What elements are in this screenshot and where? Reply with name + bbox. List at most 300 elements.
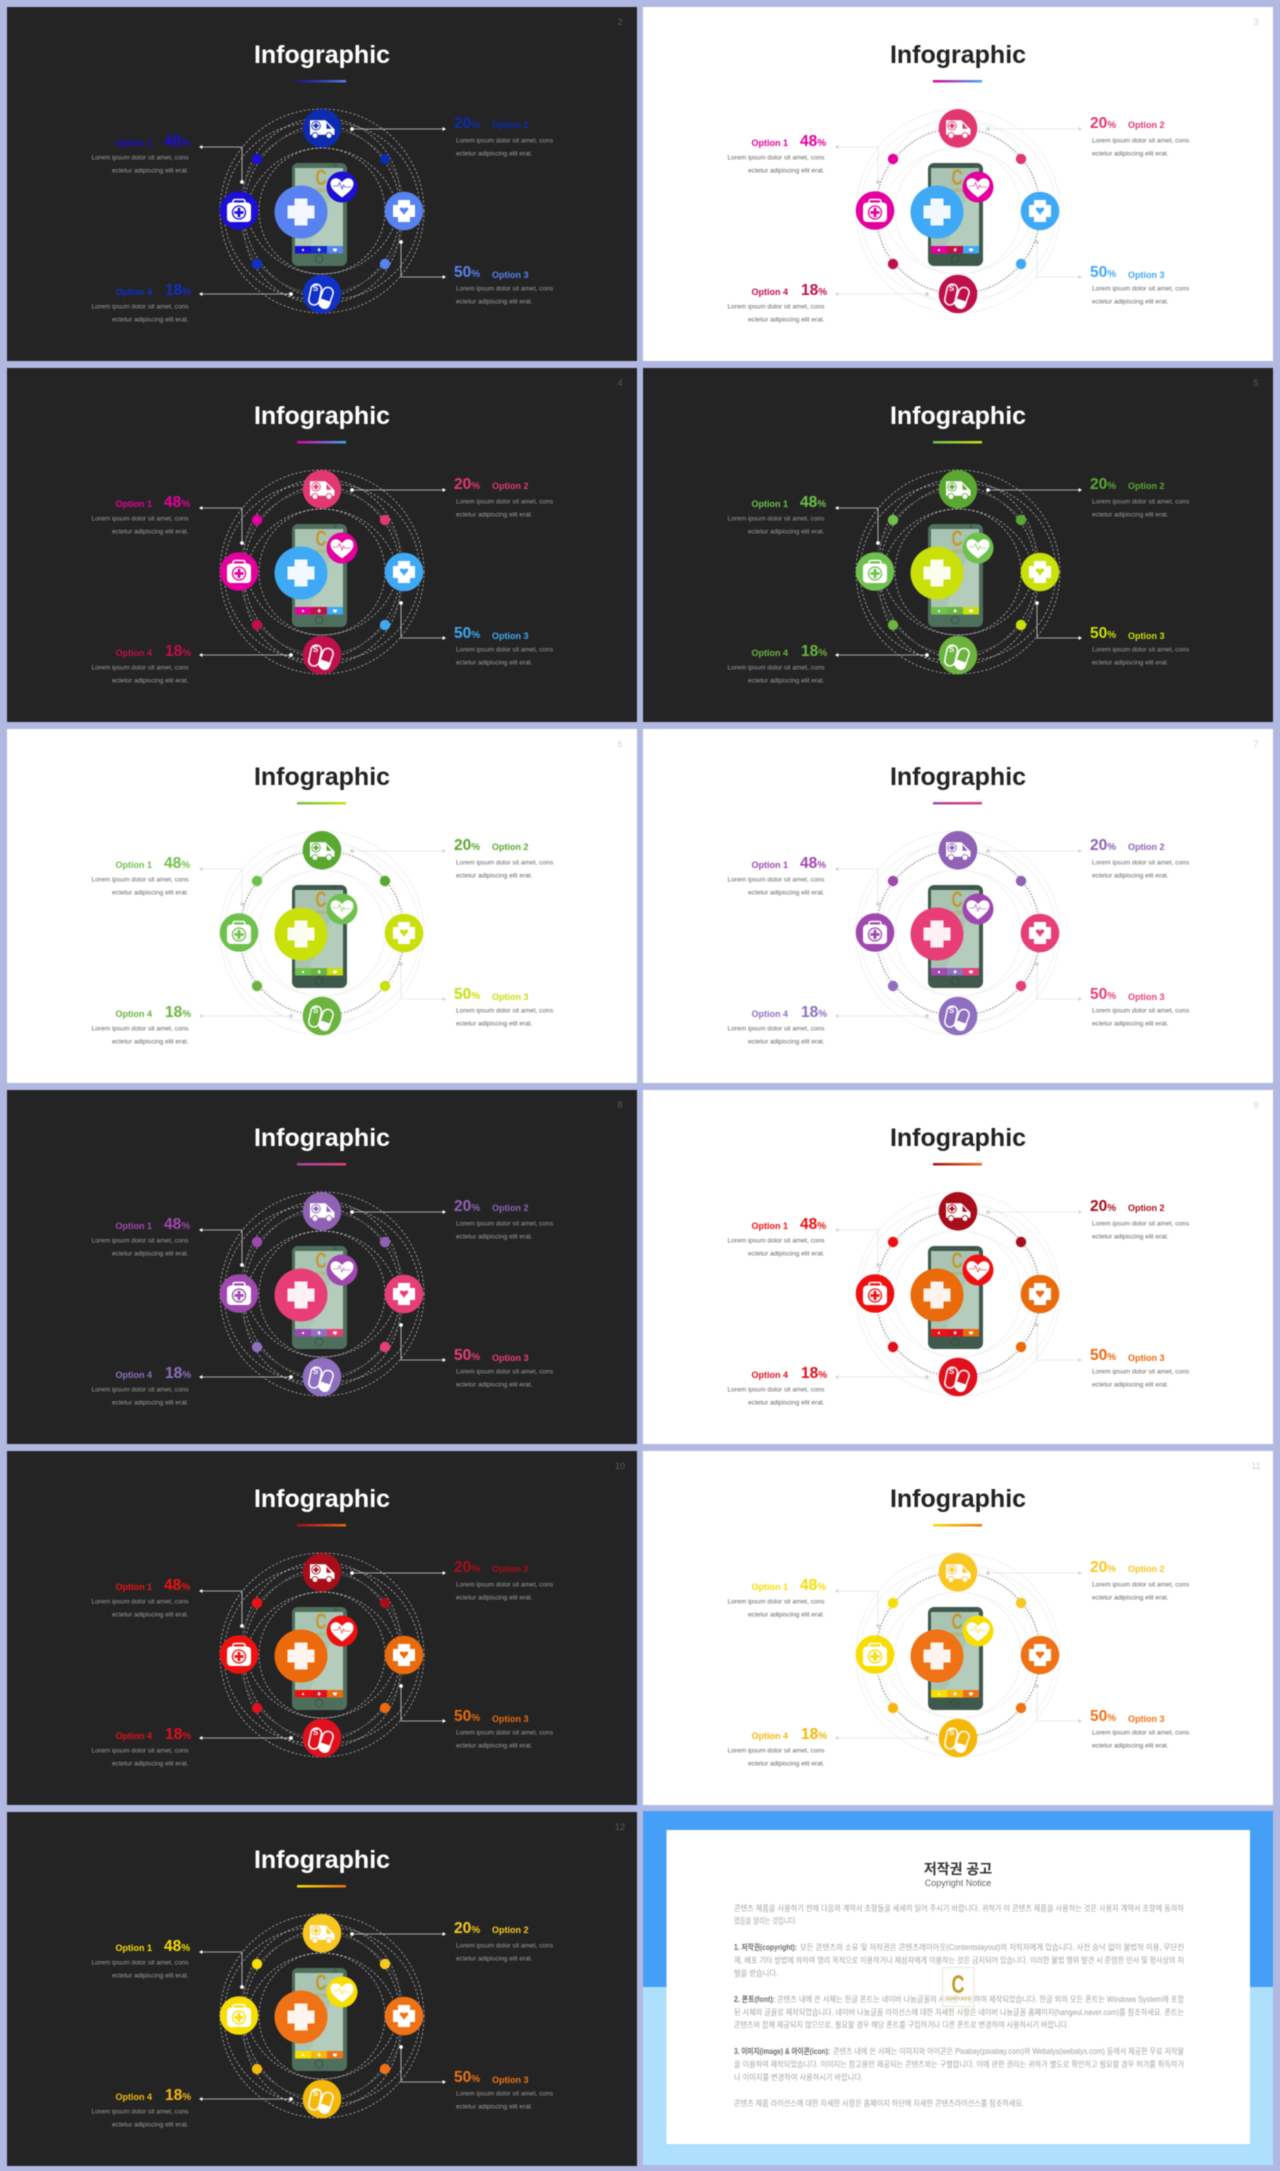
phone	[928, 1246, 983, 1349]
callout: option 1	[727, 1216, 880, 1267]
watermark: CONTENTS	[945, 910, 969, 915]
callout: option 2: Lorem ipsum dolor sit amet, cons	[456, 1942, 554, 1950]
callout: option 1	[91, 133, 244, 184]
callout: option 4: Option 4	[116, 648, 152, 658]
phone	[928, 885, 983, 988]
icon: cross with heart	[1021, 1636, 1059, 1674]
callout: option 1: ectetur adipiscing elit erat.	[748, 168, 825, 174]
watermark: C	[952, 1248, 963, 1273]
phone	[292, 1607, 347, 1710]
icon: medical kit	[220, 1274, 258, 1313]
page number: 7	[1253, 739, 1259, 749]
callout: option 2: Lorem ipsum dolor sit amet, cons	[456, 860, 554, 866]
icon: medical plus	[910, 186, 964, 238]
callout: option 4: 18%	[801, 1004, 827, 1021]
orbit dots	[252, 876, 390, 991]
icon: medical plus	[274, 1268, 328, 1322]
callout: option 4: ectetur adipiscing elit erat.	[112, 678, 189, 684]
callout: option 1: Lorem ipsum dolor sit amet, cons	[91, 1960, 189, 1966]
panel: copyright notice	[642, 1810, 1274, 2166]
notice section 1	[734, 1942, 1184, 1978]
diagram	[220, 1553, 424, 1757]
callout: option 1: ectetur adipiscing elit erat.	[112, 1612, 189, 1618]
callout: option 4: Option 4	[752, 648, 788, 658]
callout: option 2: Lorem ipsum dolor sit amet, cons	[1092, 860, 1190, 866]
panel: slide 2 dark blue	[6, 6, 638, 362]
page number: 2	[617, 17, 623, 27]
callout: option 4	[91, 1726, 293, 1768]
callout: option 1: Lorem ipsum dolor sit amet, cons	[727, 1238, 825, 1244]
callout: option 3: Lorem ipsum dolor sit amet, cons	[456, 646, 554, 654]
callout: option 3	[399, 601, 554, 666]
callout: option 3: ectetur adipiscing elit erat.	[456, 1742, 533, 1750]
callout: option 1: ectetur adipiscing elit erat.	[748, 1250, 825, 1258]
callout: option 2: 20%	[1090, 115, 1116, 132]
icon: pills	[303, 997, 341, 1035]
callout: option 2: Option 2	[492, 1203, 528, 1213]
icon: heart pulse	[326, 1976, 358, 2008]
icon: cross with heart	[385, 553, 423, 591]
watermark: C	[316, 1609, 327, 1634]
callout: option 1	[91, 1577, 244, 1628]
callout: option 2: 20%	[454, 1920, 480, 1937]
notice section 3: 3. 이미지(image) & 아이콘(icon):	[734, 2046, 830, 2056]
notice section 3: 콘텐츠 내에 쓴 서체는 이미지와 아이콘은 Pixabay(pixabay.com)와 Webalys(webalys.com) 등에서 제공한 무료 저작물	[833, 2046, 1184, 2056]
callout: option 1	[727, 855, 880, 906]
watermark	[309, 1248, 333, 1276]
callout: option 1: 48%	[164, 133, 190, 150]
callout: option 3	[1035, 1684, 1190, 1750]
callout: option 2: 20%	[454, 115, 480, 132]
phone	[928, 524, 983, 627]
watermark: CONTENTS	[945, 549, 969, 554]
icon: heart pulse	[326, 1254, 358, 1286]
watermark: C	[952, 1609, 963, 1634]
watermark: CONTENTS	[945, 188, 969, 193]
callout: option 2	[350, 1198, 554, 1240]
callout: option 1	[91, 855, 244, 906]
icon: pills	[939, 636, 977, 674]
watermark	[945, 526, 969, 554]
page number: 10	[615, 1461, 625, 1471]
callout: option 2: ectetur adipiscing elit erat.	[1092, 872, 1169, 880]
icon: cross with heart	[1021, 1275, 1059, 1313]
callout: option 1: Lorem ipsum dolor sit amet, cons	[727, 154, 825, 162]
callout: option 4: 18%	[165, 1365, 191, 1382]
icon: medical kit	[220, 913, 258, 952]
callout: option 1: ectetur adipiscing elit erat.	[112, 1250, 189, 1258]
callout: option 2	[350, 115, 554, 158]
callout: option 3: Option 3	[492, 992, 528, 1002]
callout: option 2: 20%	[454, 1198, 480, 1215]
diagram	[856, 1192, 1060, 1396]
callout: option 4: Option 4	[116, 1731, 152, 1741]
callout: option 3: Lorem ipsum dolor sit amet, cons	[1092, 1008, 1190, 1014]
callout: option 1	[91, 1938, 244, 1989]
callout: option 3: 50%	[1090, 264, 1116, 281]
watermark: C	[316, 1248, 327, 1273]
orbit dots	[888, 515, 1026, 630]
notice section 2: 콘텐츠 내에 쓴 서체는 한글 폰트는 네이버 나눔글꼴의 서체를 사용하여 제작되었습니다. 한글 외의 모든 폰트는 Windows System에 포함	[777, 1994, 1185, 2004]
orbit dots	[252, 1237, 390, 1352]
icon: medical kit	[856, 913, 894, 952]
callout: option 2: ectetur adipiscing elit erat.	[1092, 150, 1169, 158]
callout: option 4	[727, 282, 929, 324]
callout: option 2: Lorem ipsum dolor sit amet, cons	[456, 498, 554, 506]
notice section 3	[734, 2046, 1184, 2082]
callout: option 3: Lorem ipsum dolor sit amet, cons	[1092, 286, 1190, 292]
icon: ambulance	[303, 831, 341, 870]
callout: option 3	[1035, 962, 1190, 1028]
callout: option 3: Lorem ipsum dolor sit amet, cons	[456, 1368, 554, 1376]
title underline	[933, 802, 982, 804]
notice section 3: 을 이용하여 제작되었습니다. 이미지는 참고용만 제공되는 콘텐츠와는 구별합니다. 이에 관한 권리는 귀하가 별도로 확인하고 필요할 경우 허가를 취득하거	[734, 2059, 1184, 2069]
panel: slide 7 light purple	[642, 728, 1274, 1084]
callout: option 3	[1035, 601, 1190, 666]
callout: option 2: 20%	[454, 837, 480, 854]
notice section 2: 콘텐츠와 함께 제공되지 않으므로, 필요할 경우 해당 폰트를 구입하거나 다른 폰트로 변경하여 사용하시기 바랍니다.	[734, 2020, 1069, 2030]
callout: option 1: ectetur adipiscing elit erat.	[112, 168, 189, 174]
callout: option 4: Lorem ipsum dolor sit amet, cons	[91, 1386, 189, 1394]
icon: pills	[303, 1719, 341, 1757]
watermark	[309, 165, 333, 193]
callout: option 3: ectetur adipiscing elit erat.	[456, 1020, 533, 1028]
callout: option 2	[986, 1559, 1190, 1602]
page number: 3	[1253, 17, 1259, 27]
icon: ambulance	[303, 109, 341, 148]
icon: ambulance	[303, 1192, 341, 1231]
callout: option 4: Option 4	[116, 1009, 152, 1019]
callout: option 1	[727, 494, 880, 545]
phone	[292, 163, 347, 266]
callout: option 3	[399, 240, 554, 306]
watermark: CONTENTS	[309, 1632, 333, 1637]
callout: option 3: 50%	[454, 1708, 480, 1725]
callout: option 3: Lorem ipsum dolor sit amet, cons	[1092, 1368, 1190, 1376]
watermark	[942, 1968, 974, 2006]
callout: option 3: Lorem ipsum dolor sit amet, cons	[1092, 1730, 1190, 1736]
callout: option 4: ectetur adipiscing elit erat.	[112, 2122, 189, 2128]
phone	[292, 524, 347, 627]
callout: option 2	[350, 476, 554, 518]
callout: option 4: Lorem ipsum dolor sit amet, cons	[727, 1748, 825, 1754]
callout: option 2: ectetur adipiscing elit erat.	[456, 150, 533, 158]
callout: option 2: Lorem ipsum dolor sit amet, cons	[1092, 138, 1190, 144]
icon: cross with heart	[1021, 192, 1059, 230]
notice section 1: 벌을 받습니다.	[734, 1968, 778, 1978]
callout: option 3: Lorem ipsum dolor sit amet, cons	[456, 1730, 554, 1736]
callout: option 4: ectetur adipiscing elit erat.	[112, 1400, 189, 1406]
title: Infographic	[890, 1485, 1026, 1513]
callout: option 3: Option 3	[1128, 270, 1164, 280]
callout: option 4: Lorem ipsum dolor sit amet, cons	[91, 2108, 189, 2116]
panel: slide 3 light pink	[642, 6, 1274, 362]
icon: cross with heart	[385, 914, 423, 952]
watermark: C	[316, 165, 327, 190]
callout: option 4	[91, 1004, 293, 1046]
callout: option 3: 50%	[1090, 1708, 1116, 1725]
icon: heart pulse	[962, 172, 994, 202]
diagram	[220, 1914, 424, 2118]
diagram	[856, 109, 1060, 313]
callout: option 1: Option 1	[752, 138, 788, 148]
callout: option 2: Option 2	[1128, 1564, 1164, 1574]
callout: option 2: ectetur adipiscing elit erat.	[456, 872, 533, 880]
orbit dots	[888, 876, 1026, 991]
icon: medical plus	[910, 546, 964, 600]
icon: medical plus	[274, 1990, 328, 2044]
title: Infographic	[254, 1846, 390, 1874]
title underline	[933, 1163, 982, 1166]
callout: option 1: Lorem ipsum dolor sit amet, cons	[727, 1598, 825, 1606]
icon: pills	[303, 275, 341, 313]
icon: medical plus	[274, 908, 328, 960]
watermark	[309, 526, 333, 554]
orbit dots	[252, 154, 390, 269]
icon: medical plus	[274, 1630, 328, 1682]
watermark	[945, 1248, 969, 1276]
watermark	[945, 1609, 969, 1637]
page number: 6	[617, 739, 623, 749]
watermark: CONTENTS	[309, 1993, 333, 1998]
icon: heart pulse	[962, 1616, 994, 1646]
callout: option 3: Option 3	[492, 1714, 528, 1724]
diagram	[220, 470, 424, 674]
phone	[928, 163, 983, 266]
diagram	[220, 109, 424, 313]
callout: option 2: 20%	[1090, 837, 1116, 854]
callout: option 3: 50%	[454, 625, 480, 642]
icon: medical plus	[910, 1630, 964, 1682]
callout: option 4: 18%	[801, 1365, 827, 1382]
icon: heart pulse	[962, 1254, 994, 1286]
notice intro: 콘텐츠 제품을 사용하기 전에 다음의 계약서 조항들을 세세히 읽어 주시기 바랍니다. 귀하가 이 콘텐츠 제품을 사용하는 것은 사용자 계약서 조항에 동의하	[734, 1903, 1185, 1913]
callout: option 4: Lorem ipsum dolor sit amet, cons	[727, 304, 825, 310]
callout: option 2: 20%	[454, 1559, 480, 1576]
icon: cross with heart	[1021, 914, 1059, 952]
callout: option 1: ectetur adipiscing elit erat.	[748, 890, 825, 896]
callout: option 4	[727, 1726, 929, 1768]
callout: option 2	[350, 837, 554, 880]
callout: option 2: Option 2	[492, 481, 528, 491]
callout: option 4: 18%	[165, 2087, 191, 2104]
callout: option 2: Lorem ipsum dolor sit amet, cons	[456, 1220, 554, 1228]
callout: option 2	[986, 1198, 1190, 1240]
title underline	[297, 441, 346, 444]
icon: cross with heart	[385, 1275, 423, 1313]
watermark: CONTENTS	[946, 1996, 970, 2001]
notice section 2	[734, 1994, 1185, 2030]
callout: option 2: Option 2	[492, 1925, 528, 1935]
callout: option 4: Lorem ipsum dolor sit amet, cons	[727, 1386, 825, 1394]
callout: option 2	[986, 837, 1190, 880]
callout: option 1: ectetur adipiscing elit erat.	[748, 1612, 825, 1618]
callout: option 3: Option 3	[1128, 631, 1164, 641]
callout: option 3: 50%	[454, 264, 480, 281]
callout: option 2: Lorem ipsum dolor sit amet, cons	[1092, 1220, 1190, 1228]
callout: option 1: 48%	[800, 133, 826, 150]
callout: option 1: Lorem ipsum dolor sit amet, cons	[91, 876, 189, 884]
title: Infographic	[890, 763, 1026, 791]
watermark: C	[952, 526, 963, 551]
callout: option 1	[91, 1216, 244, 1267]
watermark: C	[952, 165, 963, 190]
watermark: CONTENTS	[309, 910, 333, 915]
callout: option 1: 48%	[164, 1577, 190, 1594]
panel: slide 11 light yellow	[642, 1450, 1274, 1806]
callout: option 2: 20%	[1090, 1198, 1116, 1215]
callout: option 4: ectetur adipiscing elit erat.	[748, 678, 825, 684]
callout: option 2: Option 2	[1128, 481, 1164, 491]
callout: option 2: 20%	[454, 476, 480, 493]
panel: slide 8 dark purple	[6, 1089, 638, 1445]
title underline	[297, 80, 346, 82]
title underline	[933, 80, 982, 82]
icon: pills	[303, 2080, 341, 2118]
callout: option 1	[727, 1577, 880, 1628]
icon: medical kit	[856, 552, 894, 591]
notice footer line: 콘텐츠 제품 라이선스에 대한 자세한 사항은 홈페이지 하단에 자세한 콘텐츠라이선스를 참조하세요.	[734, 2098, 1024, 2108]
icon: pills	[939, 997, 977, 1035]
callout: option 1: 48%	[800, 494, 826, 511]
callout: option 4: ectetur adipiscing elit erat.	[112, 1038, 189, 1046]
callout: option 3: ectetur adipiscing elit erat.	[1092, 1742, 1169, 1750]
callout: option 3	[399, 1323, 554, 1388]
callout: option 3: ectetur adipiscing elit erat.	[1092, 1020, 1169, 1028]
callout: option 4: 18%	[801, 643, 827, 660]
callout: option 3: Lorem ipsum dolor sit amet, cons	[456, 1008, 554, 1014]
watermark: C	[952, 887, 963, 912]
icon: ambulance	[939, 109, 977, 148]
callout: option 1: Lorem ipsum dolor sit amet, cons	[727, 876, 825, 884]
title underline	[297, 802, 346, 804]
title underline	[933, 441, 982, 444]
callout: option 1: Option 1	[116, 1582, 152, 1592]
callout: option 2: Option 2	[492, 120, 528, 130]
icon: medical kit	[856, 1635, 894, 1674]
icon: medical plus	[274, 186, 328, 238]
callout: option 4: 18%	[801, 1726, 827, 1743]
orbit dots	[252, 1959, 390, 2074]
callout: option 3	[1035, 1323, 1190, 1388]
phone	[292, 1968, 347, 2071]
title: Infographic	[254, 41, 390, 69]
icon: heart pulse	[326, 894, 358, 924]
notice section 1: 1. 저작권(copyright):	[734, 1942, 797, 1952]
diagram	[856, 1553, 1060, 1757]
callout: option 4: Lorem ipsum dolor sit amet, cons	[727, 1026, 825, 1032]
callout: option 2: Option 2	[1128, 1203, 1164, 1213]
callout: option 2: ectetur adipiscing elit erat.	[456, 1956, 533, 1962]
callout: option 3: ectetur adipiscing elit erat.	[1092, 1382, 1169, 1388]
panel: slide 9 light red	[642, 1090, 1274, 1444]
callout: option 1: 48%	[800, 1216, 826, 1233]
orbit dots	[888, 154, 1026, 269]
callout: option 2: ectetur adipiscing elit erat.	[456, 1594, 533, 1602]
callout: option 4: 18%	[801, 282, 827, 299]
callout: option 4	[91, 282, 293, 324]
callout: option 2: Lorem ipsum dolor sit amet, cons	[456, 138, 554, 144]
title: Infographic	[890, 41, 1026, 69]
callout: option 4: ectetur adipiscing elit erat.	[112, 316, 189, 324]
icon: cross with heart	[385, 1636, 423, 1674]
callout: option 2: Lorem ipsum dolor sit amet, cons	[456, 1582, 554, 1588]
icon: ambulance	[939, 831, 977, 870]
icon: heart pulse	[326, 172, 358, 202]
callout: option 1	[91, 494, 244, 545]
callout: option 3: 50%	[454, 986, 480, 1003]
callout: option 1: ectetur adipiscing elit erat.	[748, 528, 825, 536]
callout: option 4	[91, 2087, 293, 2128]
callout: option 1: Option 1	[752, 1582, 788, 1592]
callout: option 3: 50%	[454, 2069, 480, 2086]
callout: option 3	[399, 1684, 554, 1750]
panel: slide 4 dark pink	[6, 367, 638, 723]
callout: option 3: ectetur adipiscing elit erat.	[456, 2104, 533, 2110]
icon: medical kit	[856, 191, 894, 230]
callout: option 3: Option 3	[492, 270, 528, 280]
callout: option 4: ectetur adipiscing elit erat.	[112, 1760, 189, 1768]
watermark: CONTENTS	[309, 188, 333, 193]
phone	[292, 885, 347, 988]
diagram	[856, 831, 1060, 1035]
callout: option 1: 48%	[800, 855, 826, 872]
title: Infographic	[890, 402, 1026, 430]
icon: medical kit	[220, 191, 258, 230]
icon: medical kit	[856, 1274, 894, 1313]
callout: option 3: Lorem ipsum dolor sit amet, cons	[456, 2090, 554, 2098]
callout: option 3: ectetur adipiscing elit erat.	[456, 1382, 533, 1388]
icon: heart pulse	[326, 532, 358, 564]
notice section 2: 된 서체의 글꼴로 제작되었습니다. 네이버 나눔글꼴 라이선스에 대한 자세한 사항은 네이버 나눔글꼴 홈페이지(hangeul.naver.com)를 참조하세요. 폰트는	[734, 2007, 1184, 2017]
callout: option 4	[727, 1365, 929, 1406]
panel: slide 5 dark green	[642, 367, 1274, 723]
callout: option 1: ectetur adipiscing elit erat.	[112, 528, 189, 536]
callout: option 3: 50%	[454, 1347, 480, 1364]
page number: 8	[617, 1100, 623, 1110]
watermark: C	[316, 887, 327, 912]
callout: option 1: Lorem ipsum dolor sit amet, cons	[91, 154, 189, 162]
title: Infographic	[254, 1124, 390, 1152]
callout: option 4: Option 4	[116, 2092, 152, 2102]
icon: medical plus	[910, 908, 964, 960]
notice subheading: Copyright Notice	[925, 1878, 991, 1888]
notice intro: 였음을 알리는 것입니다.	[734, 1916, 797, 1926]
callout: option 3: ectetur adipiscing elit erat.	[456, 298, 533, 306]
callout: option 3: 50%	[1090, 986, 1116, 1003]
callout: option 2: Option 2	[492, 1564, 528, 1574]
callout: option 3: ectetur adipiscing elit erat.	[1092, 298, 1169, 306]
notice intro	[734, 1903, 1185, 1926]
title underline	[297, 1163, 346, 1166]
callout: option 4: Option 4	[752, 287, 788, 297]
icon: ambulance	[303, 1553, 341, 1592]
callout: option 2: ectetur adipiscing elit erat.	[1092, 512, 1169, 518]
callout: option 2: Lorem ipsum dolor sit amet, cons	[1092, 498, 1190, 506]
icon: heart pulse	[962, 532, 994, 564]
callout: option 4: Option 4	[752, 1009, 788, 1019]
icon: ambulance	[939, 1192, 977, 1231]
callout: option 1: ectetur adipiscing elit erat.	[112, 890, 189, 896]
watermark	[309, 1970, 333, 1998]
watermark: CONTENTS	[309, 1271, 333, 1276]
diagram	[220, 831, 424, 1035]
callout: option 2	[986, 476, 1190, 518]
callout: option 3: ectetur adipiscing elit erat.	[456, 660, 533, 666]
callout: option 1: Option 1	[752, 860, 788, 870]
orbit dots	[252, 515, 390, 630]
diagram	[856, 470, 1060, 674]
